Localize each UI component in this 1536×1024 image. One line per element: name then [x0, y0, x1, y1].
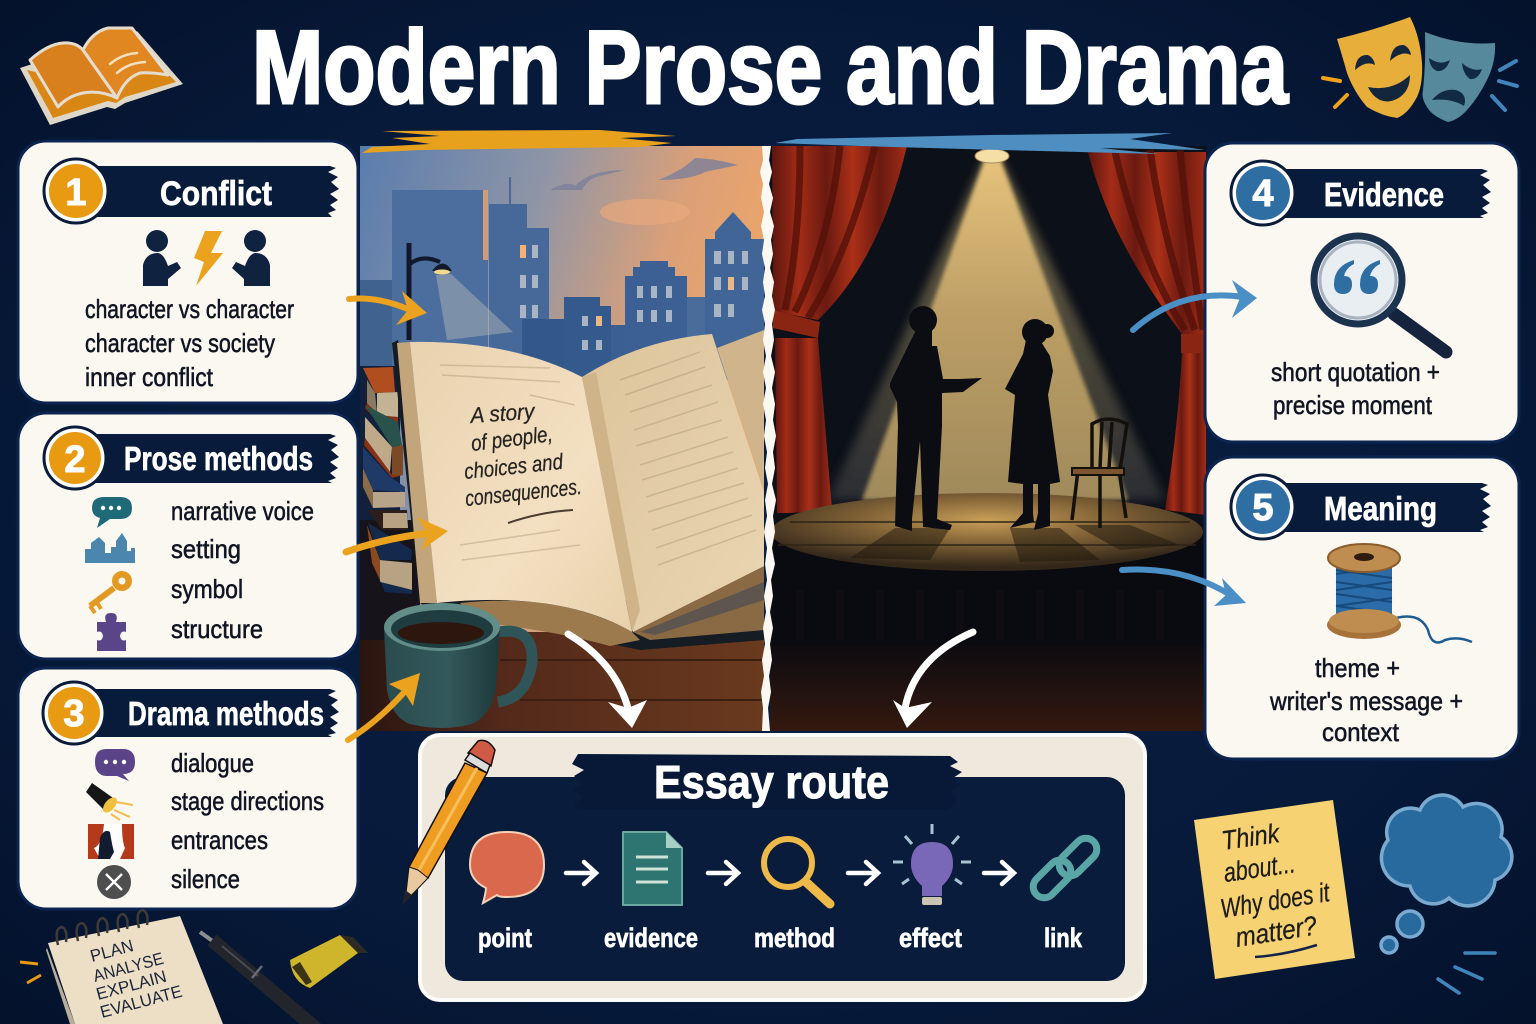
number badge: 4: [1252, 173, 1274, 215]
city skyline: [360, 177, 764, 387]
notepad: [20, 910, 223, 1024]
sticky note: [1194, 800, 1355, 979]
arrow: prose scene to essay route: [568, 634, 647, 728]
list text: setting: [171, 534, 241, 564]
icon: thought cloud: [1381, 795, 1512, 993]
flow arrow: [848, 862, 878, 884]
clouds: [550, 158, 738, 190]
text: meaning description: context: [1322, 717, 1400, 747]
step labels: point: [478, 923, 532, 953]
flow arrow: [566, 862, 596, 884]
list text: symbol: [171, 574, 243, 604]
brush stroke: orange: [362, 130, 676, 153]
icon: lightbulb: [893, 824, 971, 905]
coffee mug: [384, 603, 532, 728]
panel 2: prose methods: [18, 413, 358, 659]
icon: spotlight: [86, 783, 133, 820]
book stack: [363, 367, 412, 594]
icon: people and lightning: [143, 230, 270, 286]
handwriting on page: [465, 406, 580, 506]
text: meaning description: [1269, 653, 1463, 747]
list text: character vs society: [85, 328, 275, 358]
icon: key: [90, 571, 132, 613]
notepad: EXPLAIN: [94, 967, 169, 1004]
arrow: meaning to scene: [1122, 570, 1246, 606]
text: meaning description: theme +: [1315, 653, 1400, 683]
open book: [392, 330, 764, 650]
step labels: link: [1044, 923, 1083, 953]
heading text: Conflict: [160, 175, 272, 213]
number badge: [44, 427, 106, 489]
list text: character vs character: [85, 294, 294, 324]
list text: stage directions: [171, 786, 324, 816]
illustration: prose scene: [360, 146, 764, 732]
number badge: 1: [65, 172, 87, 214]
arrow: evidence to scene: [1133, 280, 1257, 330]
heading text: Prose methods: [124, 440, 313, 477]
chair: [1072, 419, 1127, 528]
icon: theatre masks: [1323, 17, 1517, 122]
spotlight beam: [828, 149, 1165, 500]
sky: [360, 146, 764, 632]
illustration: drama scene: [770, 146, 1206, 732]
notepad: PLAN: [88, 936, 136, 966]
heading text: Meaning: [1324, 490, 1437, 527]
list text: [171, 496, 314, 644]
arrow: drama scene to essay route: [893, 632, 973, 728]
sticky note: Think: [1220, 818, 1283, 856]
number badge: [1231, 161, 1295, 225]
notepad: EVALUATE: [98, 982, 184, 1022]
arrow: conflict to city: [349, 291, 427, 325]
list text: [85, 294, 294, 392]
heading text: Drama methods: [128, 695, 324, 732]
handwriting on page: consequences.: [464, 474, 583, 511]
number badge: 2: [64, 439, 86, 481]
list text: entrances: [171, 825, 268, 855]
icon: crossed circle: [97, 865, 131, 899]
icon: city: [85, 533, 135, 563]
number badge: 5: [1252, 487, 1274, 529]
heading text: Essay route: [654, 756, 889, 808]
heading text: Evidence: [1324, 176, 1444, 213]
icon: puzzle: [97, 613, 126, 651]
heading ribbon: [572, 754, 962, 810]
icon: speech bubble: [92, 497, 132, 528]
highlighter: [290, 935, 368, 988]
icon: point bubble: [470, 832, 544, 903]
icon: curtains: [88, 824, 134, 859]
heading ribbon: [75, 434, 339, 483]
notepad: ANALYSE: [91, 949, 166, 986]
icon: chain link: [1029, 834, 1101, 902]
icon: magnifying glass with quote: [1314, 236, 1446, 352]
text: meaning description: writer's message +: [1269, 686, 1463, 716]
sticky note: about...: [1222, 848, 1297, 888]
handwriting on page: choices and: [463, 449, 565, 484]
flow arrow: [984, 862, 1014, 884]
panel 1: conflict: [18, 141, 358, 403]
step labels: [478, 923, 1083, 953]
panel 3: drama methods: [18, 668, 358, 909]
heading ribbon: [74, 689, 339, 737]
arrow: prose methods to book: [346, 517, 448, 552]
panel: essay route: [402, 735, 1145, 1000]
handwriting on page: of people,: [470, 421, 554, 456]
left curtain: [772, 146, 907, 513]
icon: open orange book: [20, 28, 183, 125]
icon: pencil: [402, 740, 495, 906]
table: [360, 632, 764, 732]
panel 5: meaning: [1205, 457, 1519, 759]
pen: [200, 932, 320, 1024]
list text: dialogue: [171, 748, 254, 778]
list text: [171, 748, 324, 894]
number badge: [43, 682, 105, 744]
number badge: [1231, 475, 1295, 539]
icon: thread spool: [1327, 544, 1472, 642]
number badge: 3: [63, 693, 85, 735]
stage: [774, 493, 1203, 571]
list text: silence: [171, 864, 240, 894]
list text: inner conflict: [85, 362, 214, 392]
step labels: method: [754, 923, 835, 953]
list text: narrative voice: [171, 496, 314, 526]
heading ribbon: [1263, 169, 1491, 218]
step labels: evidence: [604, 923, 698, 953]
icon: magnifier: [764, 839, 830, 904]
title: Modern Prose and Drama: [252, 10, 1289, 126]
heading ribbon: [76, 166, 339, 217]
text: evidence description: [1271, 357, 1440, 420]
step labels: effect: [899, 923, 962, 953]
woman silhouette: [1005, 319, 1060, 530]
street lamp: [409, 243, 513, 340]
text: evidence description: precise moment: [1273, 390, 1433, 420]
heading ribbon: [1263, 483, 1491, 532]
handwriting on page: A story: [468, 398, 537, 428]
number badge: [44, 159, 108, 223]
sticky note: matter?: [1233, 910, 1319, 953]
list text: structure: [171, 614, 263, 644]
icon: purple speech bubble: [95, 749, 135, 781]
flow arrow: [708, 862, 738, 884]
torn paper divider: [760, 146, 776, 731]
panel 4: evidence: [1205, 143, 1519, 442]
right curtain: [1088, 150, 1206, 515]
sticky note: Why does it: [1218, 877, 1333, 924]
arrow: drama methods to mug: [348, 673, 420, 740]
man silhouette: [890, 306, 982, 531]
icon: evidence document: [623, 832, 682, 905]
text: evidence description: short quotation +: [1271, 357, 1440, 387]
brush stroke: blue: [775, 133, 1205, 154]
